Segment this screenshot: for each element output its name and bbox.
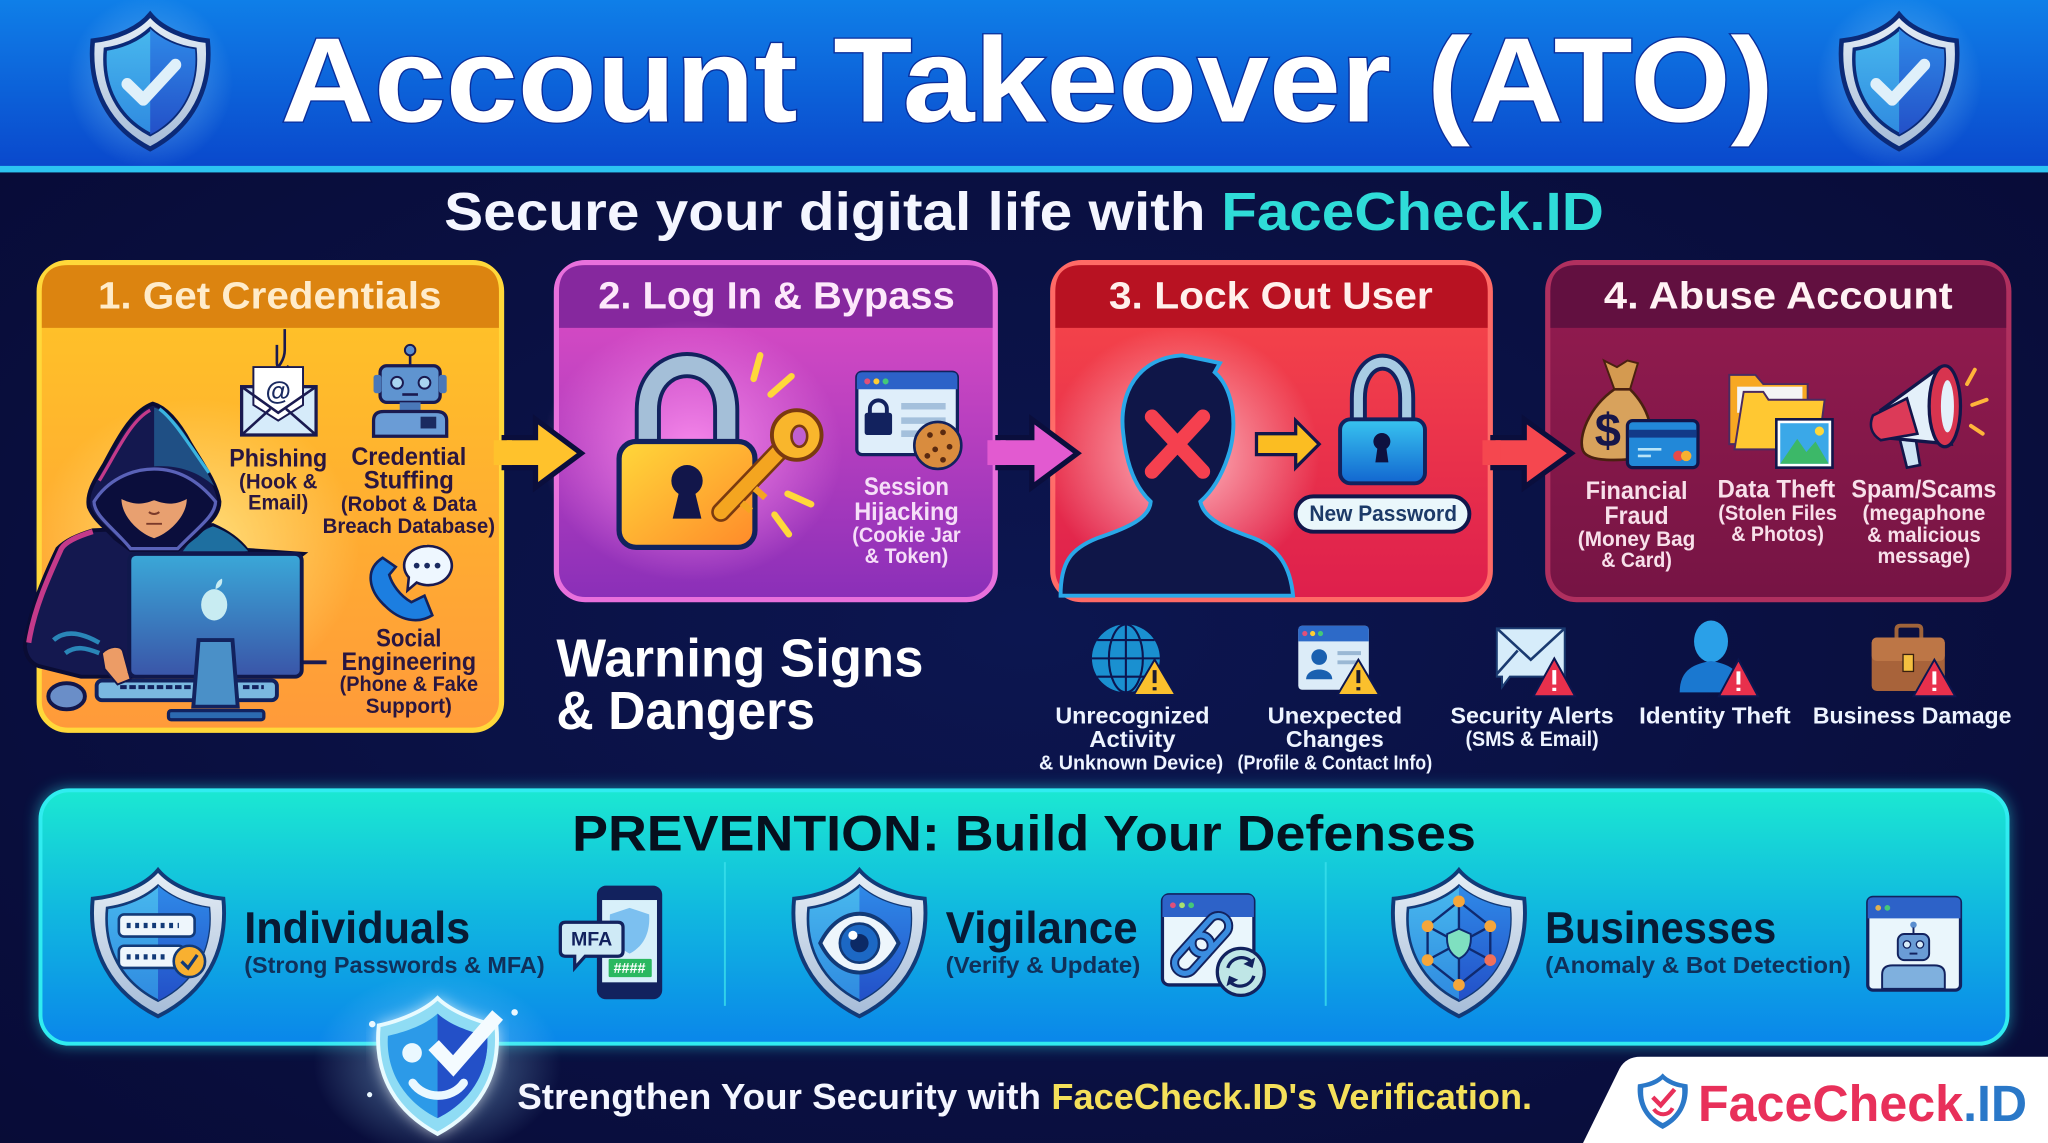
- icon: megaphone: [1871, 366, 1987, 468]
- text: phishing: [229, 445, 327, 514]
- icon: folders and photo: [1729, 375, 1832, 468]
- warning: unexpected changes: [1238, 626, 1432, 774]
- text: phishing: (Hook &: [239, 469, 317, 494]
- text: credential stuffing: Credential: [351, 444, 466, 471]
- warning: business damage: Business Damage: [1813, 703, 2011, 729]
- text: financial fraud: & Card): [1601, 547, 1672, 572]
- icon: phone with MFA bubble: ####: [614, 961, 646, 977]
- footer tagline: Strengthen Your Security with: [517, 1076, 1041, 1117]
- subtitle: Secure your digital life with: [444, 183, 1206, 242]
- icon: phone with MFA bubble: MFA: [571, 929, 612, 951]
- new password pill: New Password: [1309, 501, 1457, 526]
- group: businesses: (Anomaly & Bot Detection): [1545, 952, 1851, 978]
- illustration: hooded hacker at computer: [25, 404, 327, 720]
- text: financial fraud: Fraud: [1605, 503, 1669, 530]
- logo: FaceCheck.ID: FaceCheck: [1698, 1075, 1964, 1132]
- icon: phishing envelope: [242, 329, 316, 435]
- panel 4 header: [1550, 265, 2006, 328]
- icon: profile window with warning: [1298, 626, 1379, 695]
- icon: browser and cookie: [857, 372, 961, 469]
- text: credential stuffing: Breach Database): [323, 513, 495, 538]
- icon: robot: [374, 345, 447, 436]
- heading: warning signs: & Dangers: [556, 682, 815, 741]
- heading 3: 3. Lock Out User: [1109, 275, 1433, 317]
- icon: phone and chat bubble: [371, 546, 452, 620]
- text: credential stuffing: Stuffing: [364, 468, 454, 495]
- arrow: step 3 to 4: [1482, 419, 1571, 487]
- warning: identity theft: [1639, 620, 1791, 729]
- icon: phishing envelope: @: [265, 376, 291, 406]
- group: individuals: (Strong Passwords & MFA): [244, 952, 545, 978]
- text: phishing: Email): [248, 489, 308, 514]
- icon: network shield: [1393, 870, 1525, 1016]
- heading 1: 1. Get Credentials: [98, 275, 441, 317]
- group: businesses: [1393, 870, 1960, 1016]
- text: session hijacking: & Token): [865, 543, 948, 568]
- text: spam and scams: message): [1878, 543, 1970, 568]
- arrow: step 2 to 3: [987, 419, 1078, 487]
- panel: 4 abuse account: [1548, 263, 2009, 600]
- text: data theft: [1718, 477, 1837, 546]
- text: social engineering: (Phone & Fake: [340, 671, 478, 696]
- footer tagline: [517, 1076, 1532, 1117]
- warning: unrecognized activity: & Unknown Device): [1039, 752, 1223, 774]
- text: session hijacking: Hijacking: [854, 499, 959, 526]
- text: data theft: (Stolen Files: [1718, 500, 1837, 525]
- text: financial fraud: (Money Bag: [1578, 526, 1695, 551]
- text: social engineering: Social: [376, 626, 441, 653]
- panel: 2 log in and bypass: [542, 263, 995, 600]
- heading 2: 2. Log In & Bypass: [598, 275, 955, 317]
- text: financial fraud: [1578, 478, 1695, 572]
- header band: [0, 0, 2048, 172]
- title: Account Takeover (ATO): [281, 13, 1774, 147]
- icon: logo shield: [1638, 1073, 1688, 1129]
- text: spam and scams: & malicious: [1867, 522, 1981, 547]
- text: data theft: & Photos): [1731, 521, 1824, 546]
- text: phishing: Phishing: [229, 445, 327, 472]
- icon: blue padlock: [1340, 362, 1425, 483]
- panel: 1 get credentials: [25, 263, 502, 730]
- group: vigilance: (Verify & Update): [946, 952, 1140, 978]
- panel 2 header: [559, 265, 993, 328]
- logo: FaceCheck.ID: [1583, 1057, 2048, 1143]
- subtitle: FaceCheck.ID: [1221, 183, 1604, 242]
- icon: footer glowing shield: [313, 973, 562, 1143]
- icon: briefcase with alert: [1872, 626, 1955, 696]
- warning: unrecognized activity: [1039, 624, 1223, 774]
- text: social engineering: [340, 626, 478, 718]
- icon: locked out silhouette: [1061, 355, 1293, 596]
- heading: warning signs: [556, 630, 923, 741]
- text: data theft: Data Theft: [1718, 477, 1835, 504]
- text: session hijacking: Session: [864, 474, 949, 501]
- text: financial fraud: Financial: [1586, 478, 1688, 505]
- group: businesses: Businesses: [1545, 904, 1776, 953]
- text: spam and scams: (megaphone: [1863, 500, 1985, 525]
- icon: money bag and card: $: [1595, 404, 1621, 457]
- text: social engineering: Support): [366, 693, 452, 718]
- warning: security alerts: [1450, 628, 1614, 751]
- heading: warning signs: Warning Signs: [556, 630, 923, 689]
- text: social engineering: Engineering: [342, 649, 476, 676]
- icon: eye shield: [793, 870, 925, 1016]
- heading: prevention: PREVENTION: Build Your Defenses: [572, 805, 1476, 861]
- logo: FaceCheck.ID: .ID: [1963, 1075, 2027, 1132]
- text: credential stuffing: (Robot & Data: [341, 491, 478, 516]
- warning: security alerts: (SMS & Email): [1465, 728, 1599, 751]
- warning: security alerts: Security Alerts: [1450, 703, 1614, 729]
- text: spam and scams: [1851, 477, 1996, 568]
- icon: browser link refresh: [1162, 895, 1264, 995]
- icon: password shield: [92, 870, 224, 1016]
- warning: business damage: [1813, 626, 2011, 729]
- group: vigilance: Vigilance: [946, 904, 1138, 953]
- icon: money bag and card: [1582, 361, 1698, 468]
- icon: phone with MFA bubble: [560, 886, 662, 999]
- new password pill: [1296, 496, 1469, 532]
- icon: browser with robot: [1868, 897, 1960, 990]
- text: spam and scams: Spam/Scams: [1851, 477, 1996, 504]
- icon: shield left: [67, 0, 233, 168]
- text: session hijacking: (Cookie Jar: [852, 522, 961, 547]
- warning: identity theft: Identity Theft: [1639, 703, 1791, 729]
- warning: unexpected changes: Changes: [1286, 726, 1384, 752]
- footer tagline: FaceCheck.ID's Verification.: [1051, 1076, 1532, 1117]
- group: individuals: Individuals: [244, 904, 470, 953]
- panel: 3 lock out user: [1045, 263, 1490, 600]
- arrow: step 1 to 2: [494, 419, 581, 487]
- panel 3 header: [1055, 265, 1488, 328]
- warning: unrecognized activity: Activity: [1089, 726, 1176, 752]
- warning: unexpected changes: Unexpected: [1268, 703, 1402, 729]
- panel 1 header: [42, 265, 499, 328]
- warning: unrecognized activity: Unrecognized: [1055, 703, 1209, 729]
- group: vigilance: [793, 870, 1264, 1016]
- icon: envelope with alert: [1497, 628, 1575, 696]
- text: credential stuffing: [323, 444, 495, 538]
- panel: prevention: [39, 789, 2009, 1045]
- icon: shield right: [1816, 0, 1982, 168]
- icon: person with alert: [1680, 620, 1758, 696]
- heading 4: 4. Abuse Account: [1604, 275, 1953, 317]
- icon: yellow arrow: [1256, 421, 1319, 468]
- text: session hijacking: [852, 474, 961, 568]
- subtitle: [444, 183, 1604, 242]
- icon: globe with warning: [1092, 624, 1176, 695]
- icon: padlock with key: [619, 355, 822, 547]
- group: individuals: [92, 870, 662, 1016]
- warning: unexpected changes: (Profile & Contact Info): [1238, 752, 1432, 774]
